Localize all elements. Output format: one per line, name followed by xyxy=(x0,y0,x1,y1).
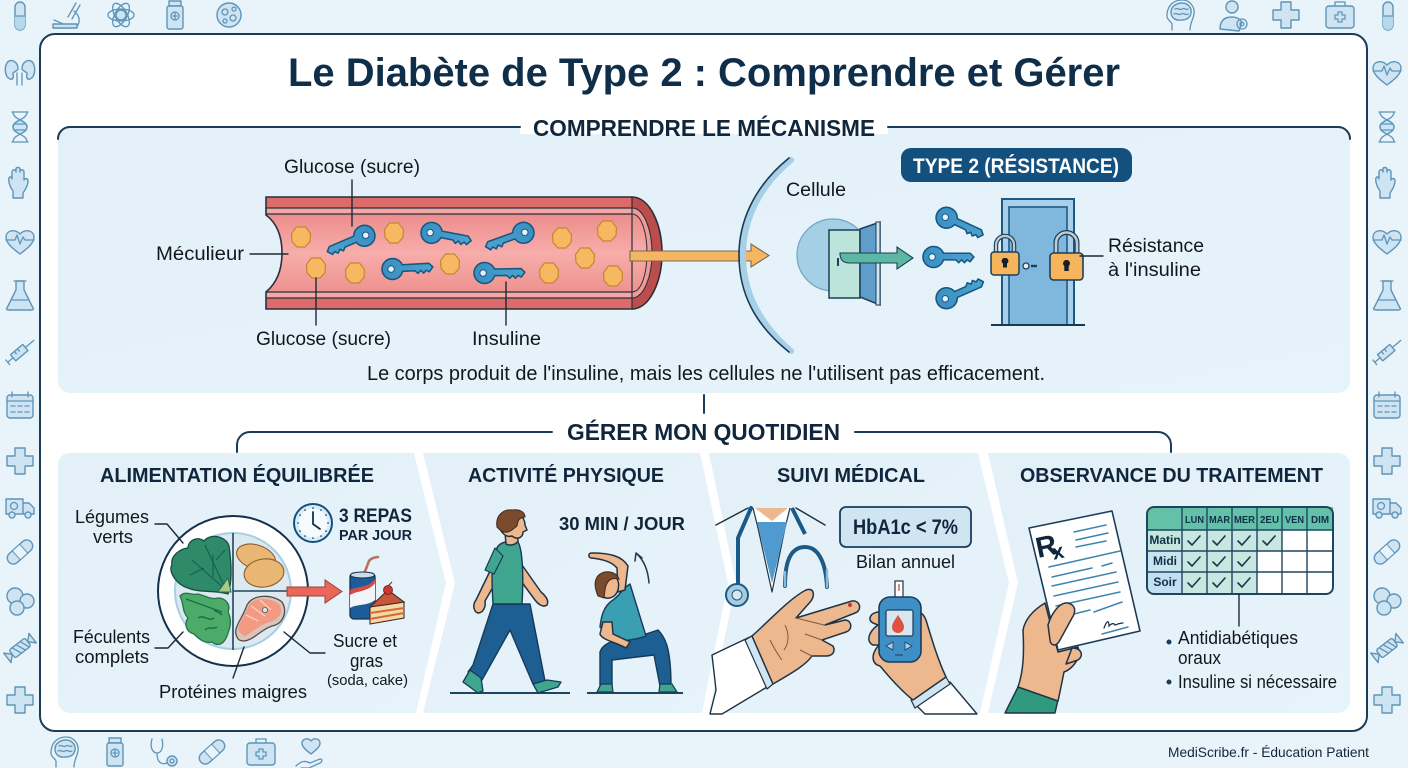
plate labels: Légumes xyxy=(75,506,149,527)
icon: glucose meter and hand xyxy=(869,581,977,714)
vessel labels: Glucose (sucre) xyxy=(256,329,391,350)
table: treatment schedule: 2EU xyxy=(1260,514,1279,526)
glucose molecules xyxy=(292,221,622,286)
icon: locked door xyxy=(991,199,1085,325)
label: résistance: Résistance xyxy=(1108,236,1204,257)
icon: doctor xyxy=(716,508,827,606)
border icons: top right xyxy=(1167,0,1393,31)
insulin keys in vessel xyxy=(323,219,537,284)
arrow: vessel to cell xyxy=(630,244,769,267)
footer credit: MediScribe.fr - Éducation Patient xyxy=(1168,744,1369,760)
plate labels: Sucre et xyxy=(333,630,397,651)
caption: mechanism: Le corps produit de l'insuline, mais les cellules ne l'utilisent pas efficacement. xyxy=(367,363,1045,385)
table: treatment schedule: LUN xyxy=(1185,514,1204,526)
badge: type 2 xyxy=(901,148,1132,182)
treatment list: Insuline si nécessaire xyxy=(1178,672,1337,692)
border icons: left column xyxy=(4,61,36,713)
icon: walking man xyxy=(450,510,570,693)
plate labels: (soda, cake) xyxy=(327,673,408,689)
table: treatment schedule: DIM xyxy=(1311,514,1329,526)
table: treatment schedule: VEN xyxy=(1285,514,1304,526)
icon: open cell door xyxy=(797,219,913,305)
border icons: right column xyxy=(1371,62,1403,713)
icon: keys blocked xyxy=(923,204,988,312)
box: HbA1c: HbA1c < 7% xyxy=(853,516,958,539)
icon: prescription and hand: x xyxy=(1050,540,1066,565)
border icons: bottom xyxy=(51,737,322,768)
text: 3 repas par jour: PAR JOUR xyxy=(339,528,413,544)
arrow: reduce xyxy=(287,580,342,603)
treatment list: oraux xyxy=(1178,647,1222,668)
icon: plate xyxy=(158,516,308,666)
bracket connector xyxy=(237,395,1171,452)
table: treatment schedule: Midi xyxy=(1153,554,1177,568)
heading: gérer mon quotidien: GÉRER MON QUOTIDIEN xyxy=(567,418,840,445)
table: treatment schedule: Matin xyxy=(1149,533,1181,547)
vessel labels: Glucose (sucre) xyxy=(284,157,420,178)
icon: stretching person xyxy=(587,553,683,693)
icon: prescription and hand xyxy=(1005,511,1140,713)
cell membrane xyxy=(739,158,791,352)
treatment connector xyxy=(1238,594,1240,626)
icon: doctor's hand xyxy=(710,589,860,714)
table: treatment schedule: Soir xyxy=(1153,575,1177,589)
heading: observance: OBSERVANCE DU TRAITEMENT xyxy=(1020,464,1323,487)
plate labels: Féculents xyxy=(73,626,150,647)
icon: prescription and hand: R xyxy=(1033,529,1060,565)
panel: alimentation xyxy=(58,453,446,713)
plate labels: gras xyxy=(350,650,383,671)
diagram: blood vessel xyxy=(266,197,662,309)
vessel labels: Insuline xyxy=(472,329,541,350)
heading: alimentation: ALIMENTATION ÉQUILIBRÉE xyxy=(100,464,374,487)
plate labels xyxy=(73,506,408,702)
text: 3 repas par jour: 3 REPAS xyxy=(339,506,412,527)
text: 30 min: 30 MIN / JOUR xyxy=(559,514,685,534)
border icons: top left xyxy=(15,1,241,30)
icon: soda and cake xyxy=(350,557,404,624)
label: résistance: à l'insuline xyxy=(1108,260,1201,281)
vessel labels: Méculieur xyxy=(156,244,245,265)
panel: comprendre le mécanisme xyxy=(58,120,1350,393)
label: résistance xyxy=(1080,236,1204,281)
treatment list xyxy=(1166,627,1337,692)
panel: suivi médical xyxy=(709,453,1009,714)
table: treatment schedule xyxy=(1147,507,1333,594)
heading: suivi: SUIVI MÉDICAL xyxy=(777,464,925,487)
badge: type 2: TYPE 2 (RÉSISTANCE) xyxy=(913,153,1119,178)
text: 3 repas par jour xyxy=(339,506,413,544)
plate labels: complets xyxy=(75,646,149,667)
table: treatment schedule: MER xyxy=(1234,514,1255,526)
plate labels: verts xyxy=(93,526,133,547)
text: bilan annuel: Bilan annuel xyxy=(856,552,955,572)
treatment list: Antidiabétiques xyxy=(1178,627,1298,648)
cell label: Cellule xyxy=(786,180,846,201)
panel: observance xyxy=(988,453,1350,713)
title: Le Diabète de Type 2 : Comprendre et Gérer xyxy=(288,51,1120,95)
panel: activité physique xyxy=(423,453,728,713)
table: treatment schedule: MAR xyxy=(1209,514,1230,526)
plate labels: Protéines maigres xyxy=(159,681,307,702)
heading: activité: ACTIVITÉ PHYSIQUE xyxy=(468,464,664,487)
icon: clock xyxy=(294,504,332,542)
heading: comprendre le mécanisme: COMPRENDRE LE MÉCANISME xyxy=(533,114,875,141)
box: HbA1c xyxy=(840,507,971,547)
vessel labels xyxy=(156,157,541,350)
